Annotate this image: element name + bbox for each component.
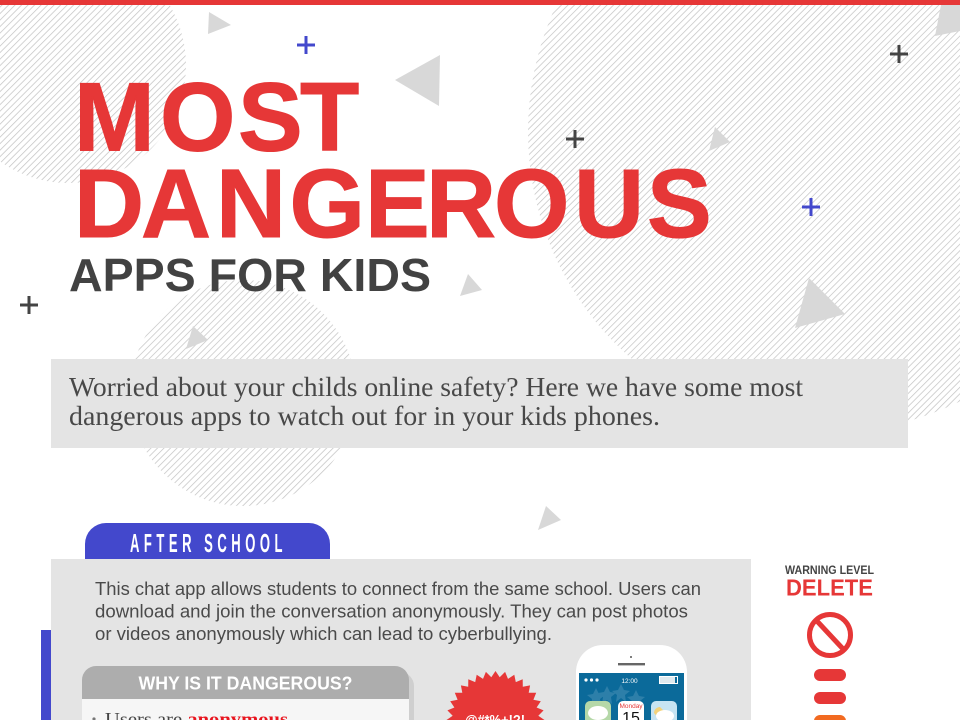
- app description: download and join the conversation anonymously. They can post photos: [95, 602, 688, 622]
- blue side strip: [41, 630, 51, 720]
- warning level: WARNING LEVEL: [785, 565, 874, 577]
- intro panel: [51, 359, 908, 448]
- warning level: [785, 565, 874, 720]
- phone illustration: [576, 645, 687, 720]
- status bar: 12:00: [621, 678, 638, 685]
- title: APPS FOR KIDS: [69, 249, 431, 301]
- panel: after school: [51, 559, 751, 720]
- wallpaper stars: [587, 684, 645, 704]
- app description: [95, 579, 701, 644]
- hatched background circles: [0, 0, 960, 506]
- top red bar: [0, 0, 960, 5]
- intro panel: dangerous apps to watch out for in your kids phones.: [69, 401, 660, 431]
- decorative plus signs: [20, 36, 908, 314]
- warning level pills: [814, 669, 846, 720]
- phone illustration: Monday: [619, 703, 643, 710]
- why is it dangerous box: WHY IS IT DANGEROUS?: [138, 674, 352, 694]
- title: DANGEROUS: [74, 149, 712, 258]
- decorative triangles: [186, 5, 960, 530]
- icon: prohibited sign: [810, 614, 850, 656]
- intro panel: Worried about your childs online safety? Here we have some most: [69, 372, 804, 402]
- profanity starburst: [446, 671, 544, 720]
- title: [69, 62, 712, 301]
- app description: or videos anonymously which can lead to cyberbullying.: [95, 624, 552, 644]
- why is it dangerous box: [82, 666, 414, 720]
- tab: after school: [85, 523, 330, 560]
- title: MOST: [74, 62, 359, 172]
- tab: after school: AFTER SCHOOL: [130, 528, 287, 558]
- warning level: DELETE: [786, 574, 873, 600]
- app icons: [585, 701, 611, 720]
- app description: This chat app allows students to connect from the same school. Users can: [95, 579, 701, 599]
